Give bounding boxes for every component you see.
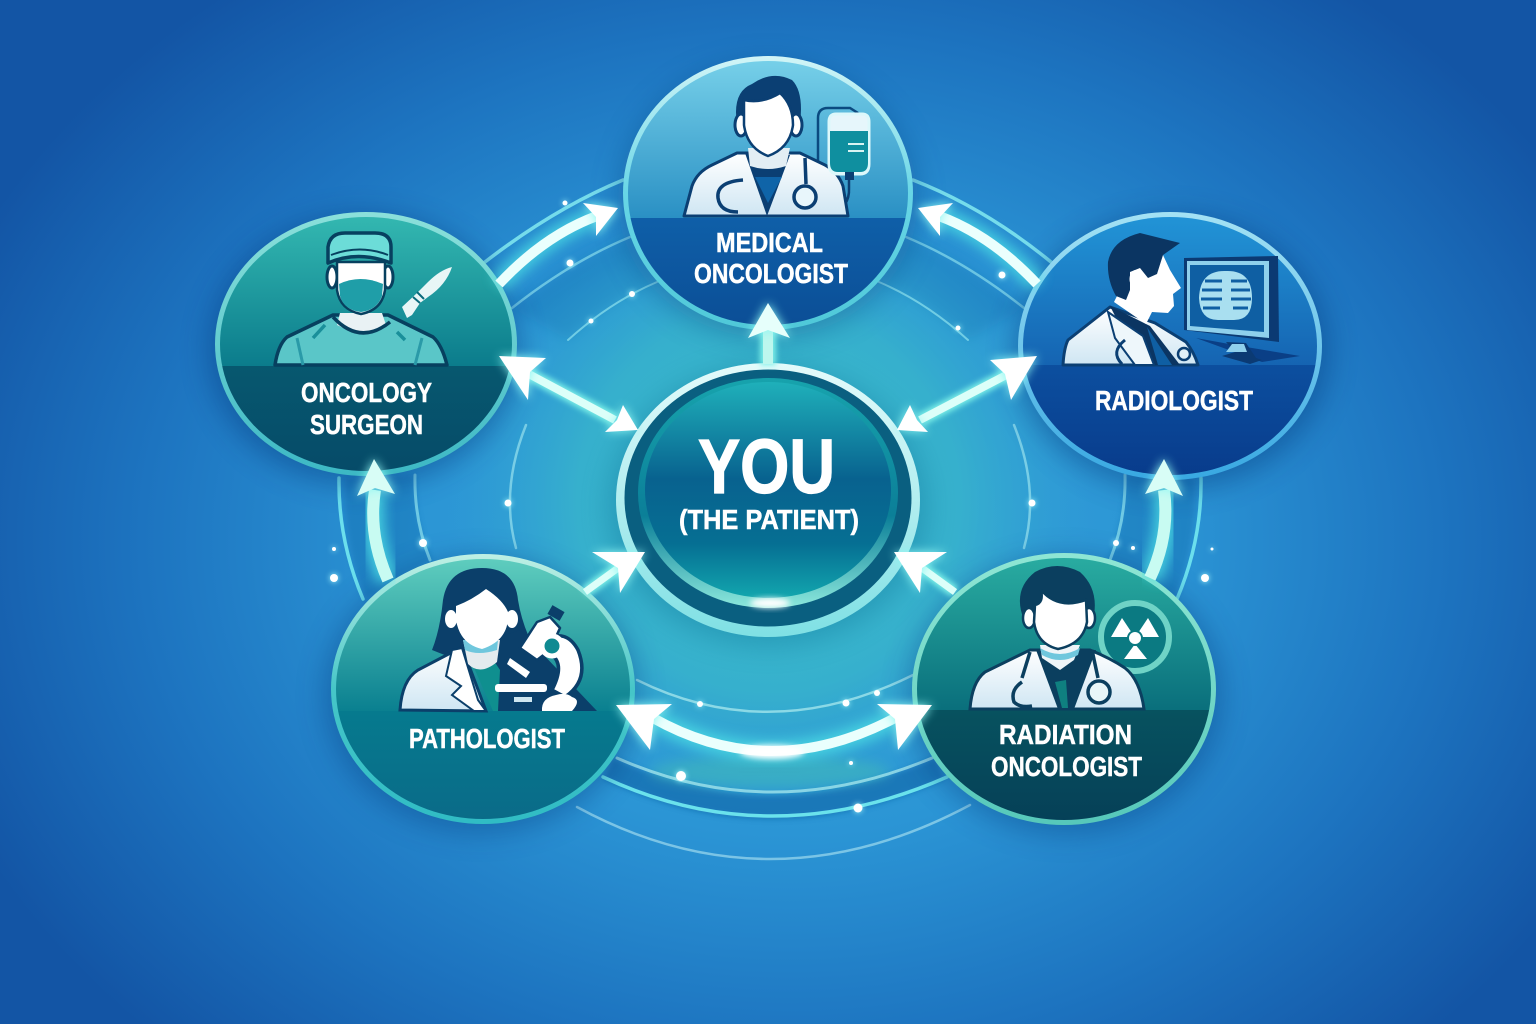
label: oncology surgeon: ONCOLOGY [301, 377, 432, 408]
centre text: (THE PATIENT) [679, 504, 859, 535]
thin orbit rings [339, 180, 1201, 859]
arrow: radiation oncologist to radiologist [1145, 459, 1183, 578]
icon: medical oncologist with IV bag [684, 76, 869, 216]
arrow: pathologist to you [585, 552, 645, 593]
circle fill oncology surgeon [220, 217, 512, 471]
icon: radiologist with x-ray monitor [1063, 233, 1300, 365]
icon: radiation oncologist [970, 566, 1144, 709]
circle: oncology surgeon [208, 210, 522, 486]
label: radiation oncologist: RADIATION [999, 719, 1132, 750]
sparkles [330, 200, 1214, 812]
icon: oncology surgeon with scalpel [275, 233, 452, 365]
circle fill pathologist [328, 553, 638, 826]
icon: pathologist with microscope [400, 568, 597, 711]
circle: medical oncologist [618, 55, 920, 338]
arrow: you and radiologist [897, 356, 1037, 432]
circle fill radiation oncologist [917, 558, 1211, 820]
label: radiation oncologist: ONCOLOGIST [991, 751, 1142, 782]
centre text: YOU [698, 424, 835, 510]
label: pathologist: PATHOLOGIST [409, 723, 565, 754]
label: radiologist: RADIOLOGIST [1095, 385, 1253, 416]
arrow: pathologist to oncology surgeon [357, 459, 395, 580]
label: radiation oncologist [991, 719, 1142, 782]
arrow: oncology surgeon to medical oncologist [499, 203, 618, 284]
label: medical oncologist: ONCOLOGIST [694, 258, 848, 289]
centre text [679, 424, 859, 535]
label: oncology surgeon [301, 377, 432, 440]
arrow: radiologist to medical oncologist [918, 203, 1037, 284]
arrow: radiation oncologist to you [894, 552, 955, 593]
centre inner disc [638, 378, 898, 608]
centre: you, the patient [608, 363, 928, 646]
circle: radiation oncologist [908, 552, 1223, 834]
label: medical oncologist: MEDICAL [716, 227, 823, 258]
icon: radiation symbol [1101, 603, 1169, 671]
circle: pathologist [324, 553, 638, 833]
label: oncology surgeon: SURGEON [310, 409, 423, 440]
label: medical oncologist [694, 227, 848, 289]
arrow: you to medical oncologist [748, 303, 790, 365]
circle fill medical oncologist [628, 61, 908, 324]
circle: radiologist [1014, 210, 1330, 490]
centre outer ring [616, 363, 920, 637]
arrow: you and oncology surgeon [499, 356, 638, 432]
arrow: pathologist and radiation oncologist [616, 704, 932, 759]
circle fill radiologist [1023, 217, 1317, 475]
